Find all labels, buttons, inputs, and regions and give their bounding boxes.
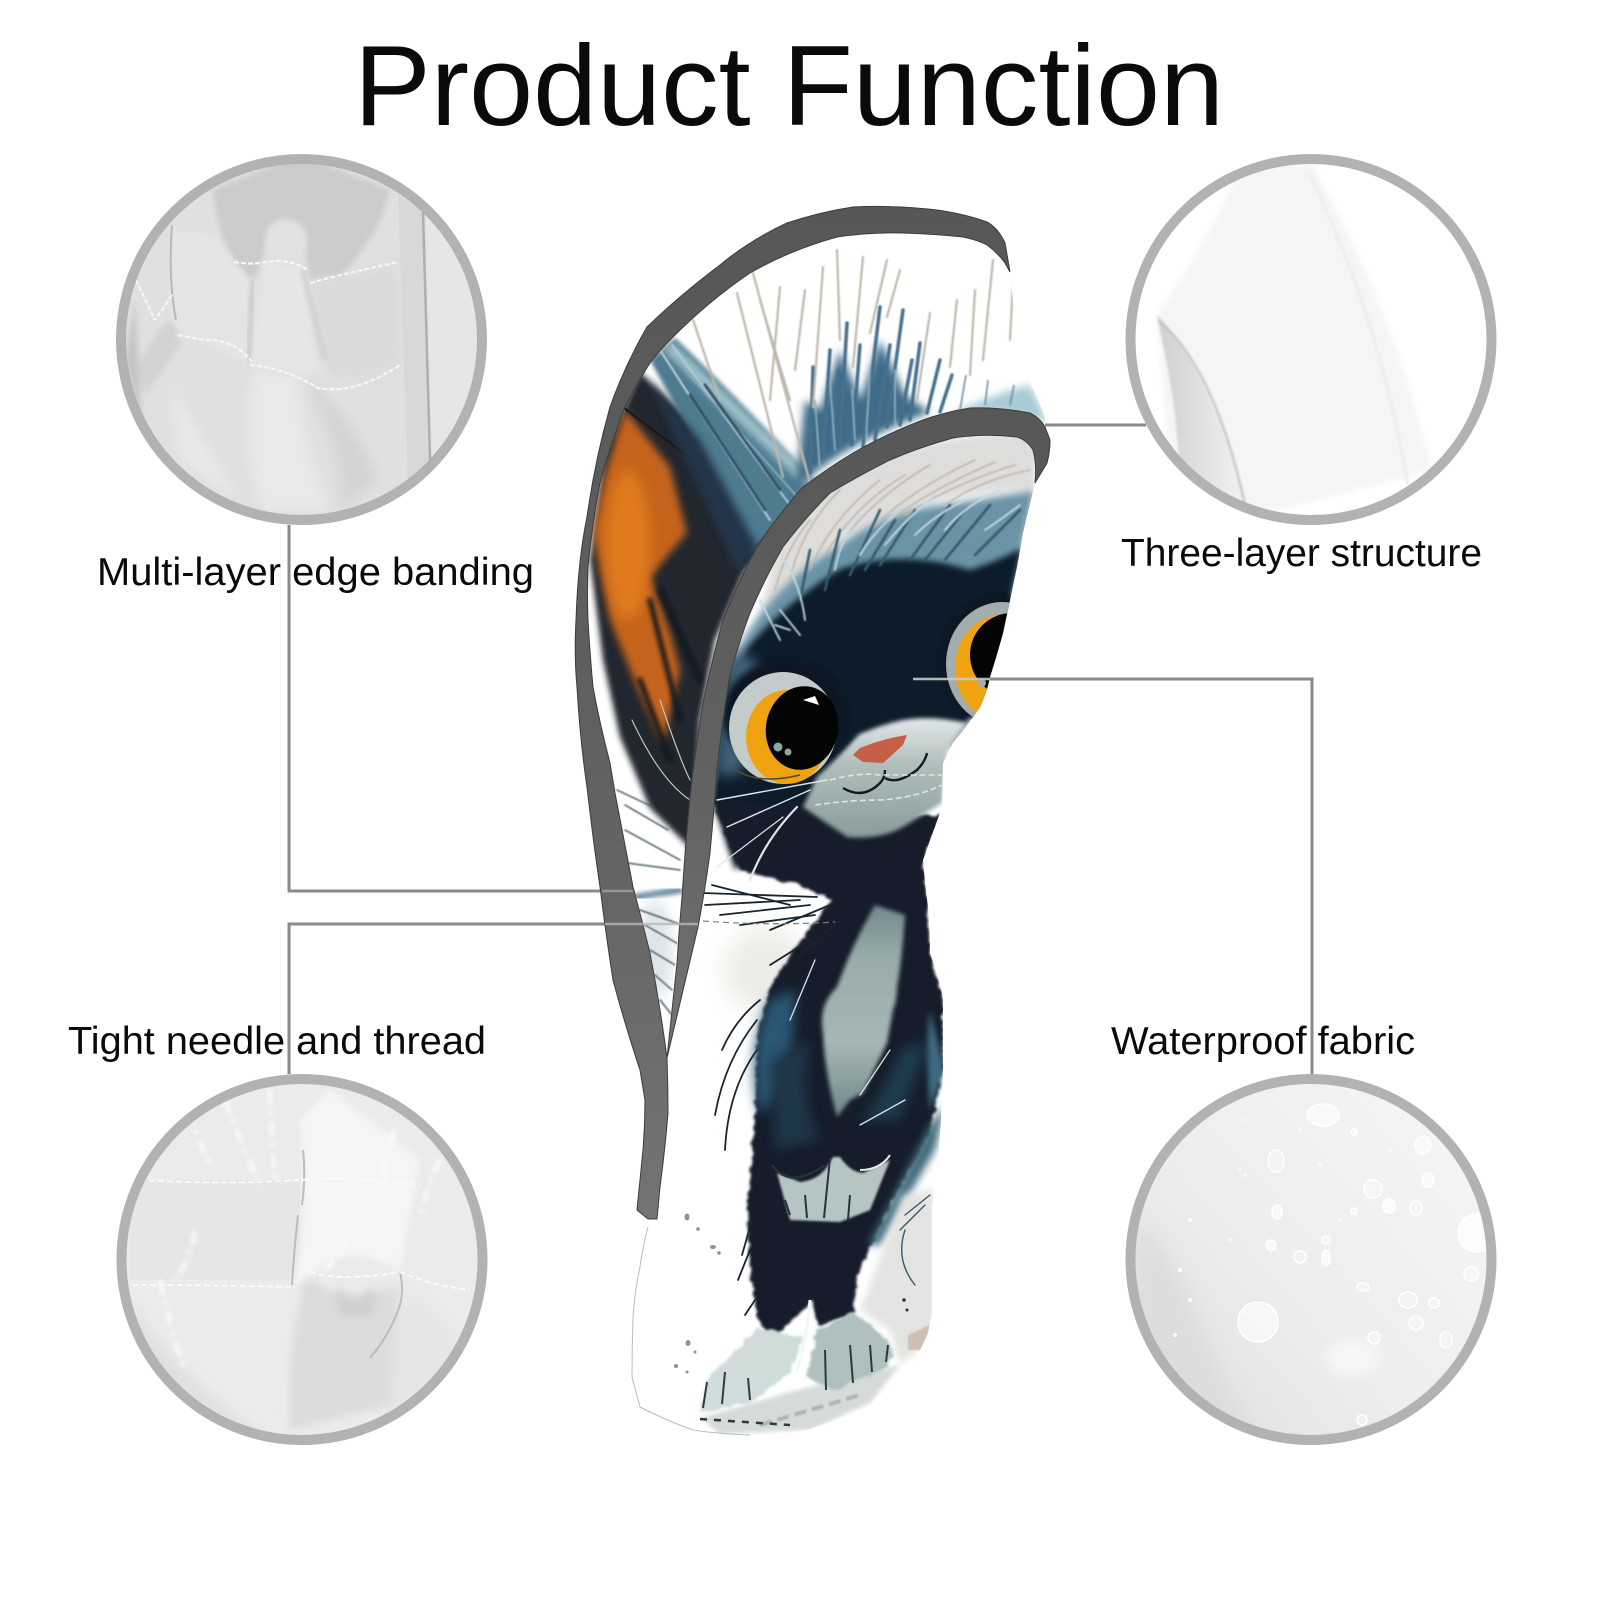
whiskers and wisps <box>703 780 930 1315</box>
paint spatter <box>674 1214 908 1374</box>
hem outline <box>632 1227 750 1435</box>
outer edge binding <box>575 206 1010 1219</box>
title: Product Function <box>354 23 1224 150</box>
label: three-layer structure: Three-layer structure <box>1121 532 1482 575</box>
blue cheek <box>716 650 765 775</box>
panel: multi-layer edge banding detail circle <box>120 150 490 530</box>
front paws <box>772 1155 890 1222</box>
panel: tight needle and thread detail circle <box>120 1075 490 1445</box>
front panel: cat illustration <box>674 436 1035 1434</box>
panel: waterproof fabric detail circle <box>1125 1075 1500 1450</box>
crest of blue spikes <box>693 250 1013 490</box>
back panel: ear and fur crest <box>588 248 1045 1016</box>
muzzle <box>803 718 967 838</box>
grey forehead <box>760 432 1040 620</box>
product: cat print golf head cover <box>560 200 1060 1440</box>
ear highlight <box>606 470 650 620</box>
body blue highlights <box>754 990 945 1245</box>
fan of blue fur <box>650 338 815 555</box>
ear streaks <box>624 408 712 800</box>
label: tight needle and thread: Tight needle and thread <box>68 1020 486 1063</box>
pale blue fold <box>945 385 1048 422</box>
lower ear white streaks <box>617 790 682 1015</box>
hood edge binding <box>667 408 1050 1058</box>
chest patch <box>822 905 905 1117</box>
panel: three-layer structure detail circle <box>1120 150 1500 530</box>
ground and lower right shade <box>700 1190 935 1434</box>
white fur wash <box>723 928 807 1012</box>
label: multi-layer edge banding: Multi-layer edge banding <box>97 551 534 594</box>
ear dark inner <box>590 372 790 850</box>
right eye <box>942 593 1012 720</box>
stitches <box>703 921 835 924</box>
leader lines under the labels <box>289 425 1312 1074</box>
left eye <box>723 660 847 784</box>
hind feet <box>700 1300 893 1412</box>
leader lines over the product <box>602 679 990 924</box>
label: waterproof fabric: Waterproof fabric <box>1111 1020 1415 1063</box>
blue fringe <box>735 490 1035 655</box>
body dark fur <box>712 800 943 1340</box>
navy head <box>712 548 1022 870</box>
ear orange <box>593 410 687 743</box>
head fur strokes <box>760 460 1030 640</box>
